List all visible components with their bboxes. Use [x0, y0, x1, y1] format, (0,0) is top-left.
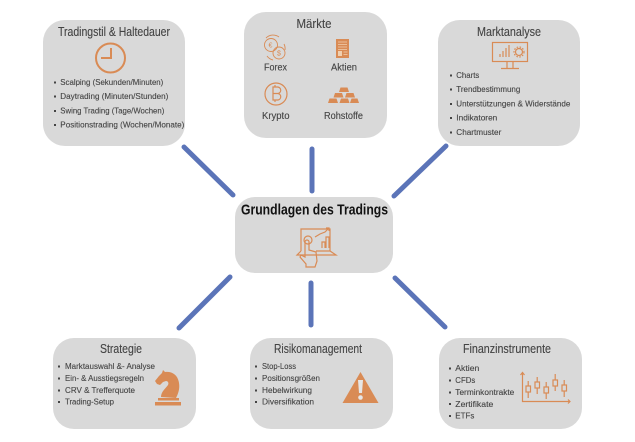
- bullet list: Swing Trading (Tage/Wochen): [60, 106, 164, 116]
- heading: Tradingstil & Haltedauer: [58, 25, 170, 39]
- icon: forex: $: [277, 50, 281, 58]
- heading: Strategie: [100, 342, 142, 356]
- bullet list: CFDs: [455, 375, 475, 385]
- icon: forex: [264, 35, 285, 60]
- bullet list: Positionsgrößen: [262, 373, 320, 383]
- heading: Märkte: [296, 17, 332, 31]
- bullet list: [58, 361, 155, 406]
- label: Krypto: Krypto: [262, 111, 290, 122]
- panel: Tradingstil & Haltedauer: [43, 20, 185, 146]
- heading: Finanzinstrumente: [463, 342, 551, 356]
- bullet list: Hebelwirkung: [262, 385, 312, 395]
- icon: bitcoin: [265, 83, 287, 105]
- heading: Grundlagen des Tradings: [241, 202, 388, 218]
- connector lines: [179, 146, 446, 328]
- panel: Grundlagen des Tradings: [235, 197, 393, 273]
- icon: chess knight: [155, 370, 181, 406]
- bullet list: Zertifikate: [455, 399, 494, 409]
- heading: Risikomanagement: [274, 342, 362, 356]
- panel: Märkte: [244, 12, 387, 138]
- bullet list: [450, 70, 571, 137]
- bullet list: [449, 363, 515, 420]
- label: Aktien: Aktien: [331, 62, 357, 74]
- bullet list: Chartmuster: [456, 127, 501, 137]
- icon: warning triangle: [342, 372, 378, 403]
- panel: Marktanalyse: [438, 20, 580, 146]
- heading: Marktanalyse: [477, 25, 541, 39]
- icon: candlestick chart: [520, 372, 570, 404]
- panel: Finanzinstrumente: [439, 338, 582, 429]
- icon: forex: €: [268, 42, 272, 50]
- bullet list: [54, 77, 184, 130]
- bullet list: Positionstrading (Wochen/Monate): [60, 120, 184, 130]
- bullet list: Trading-Setup: [65, 396, 114, 406]
- bullet list: Daytrading (Minuten/Stunden): [60, 91, 168, 101]
- icon: laptop with chart and hand: [297, 228, 336, 267]
- icon: newspaper: [336, 39, 349, 58]
- panel: Strategie: [53, 338, 196, 429]
- bullet list: Trendbestimmung: [456, 84, 520, 94]
- icon: clock: [96, 44, 125, 72]
- icon: monitor: [492, 42, 528, 68]
- bullet list: Aktien: [455, 363, 480, 373]
- bullet list: Terminkontrakte: [455, 387, 515, 397]
- label: Rohstoffe: Rohstoffe: [324, 111, 363, 122]
- bullet list: Marktauswahl &- Analyse: [65, 361, 155, 371]
- label: Forex: Forex: [264, 62, 287, 74]
- bullet list: Diversifikation: [262, 396, 314, 406]
- bullet list: Ein- & Ausstiegsregeln: [65, 373, 144, 383]
- bullet list: Charts: [456, 70, 479, 80]
- bullet list: Indikatoren: [456, 112, 498, 122]
- panel: Risikomanagement: [250, 338, 393, 429]
- icon: gold bars: [328, 88, 359, 103]
- bullet list: ETFs: [455, 410, 474, 420]
- bullet list: Scalping (Sekunden/Minuten): [60, 77, 163, 87]
- bullet list: [255, 361, 320, 406]
- bullet list: Stop-Loss: [262, 361, 296, 371]
- bullet list: CRV & Trefferquote: [65, 385, 135, 395]
- bullet list: Unterstützungen & Widerstände: [456, 98, 571, 108]
